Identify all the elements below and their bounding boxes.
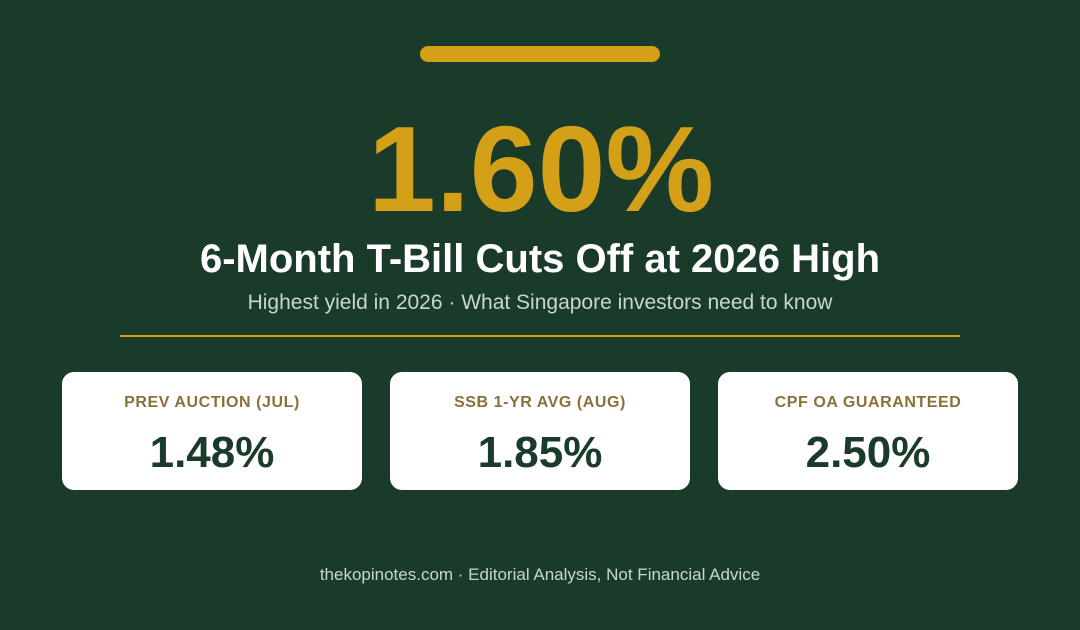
- value: CPF OA: 2.50%: [806, 428, 930, 477]
- label: SSB: SSB 1-YR AVG (AUG): [454, 394, 626, 411]
- card: CPF OA: [718, 372, 1018, 490]
- label: CPF OA: CPF OA GUARANTEED: [775, 394, 961, 411]
- footer: thekopinotes.com · Editorial Analysis, Not Financial Advice: [320, 565, 760, 584]
- card: previous auction: [62, 372, 362, 490]
- accent bar: [420, 46, 660, 62]
- subtitle: Highest yield in 2026 · What Singapore investors need to know: [248, 291, 832, 314]
- value: previous auction: 1.48%: [150, 428, 274, 477]
- card: SSB: [390, 372, 690, 490]
- headline number: 1.60%: [368, 101, 714, 237]
- title: 6-Month T-Bill Cuts Off at 2026 High: [200, 237, 880, 281]
- value: SSB: 1.85%: [478, 428, 602, 477]
- label: previous auction: PREV AUCTION (JUL): [124, 394, 300, 411]
- divider: [120, 335, 960, 337]
